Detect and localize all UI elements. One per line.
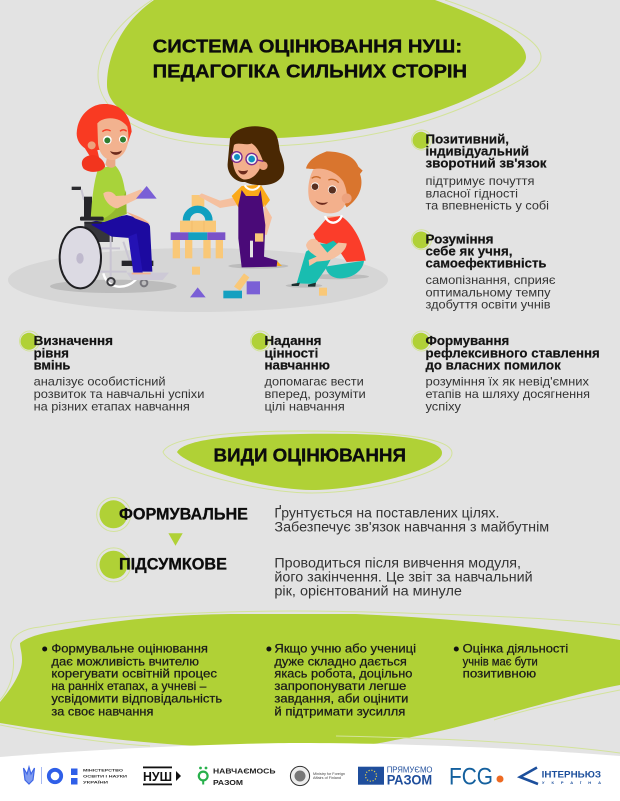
tip 3: позитивною xyxy=(463,667,536,681)
tip 1 xyxy=(42,642,222,718)
heading xyxy=(426,333,600,372)
point: value of learning xyxy=(250,331,366,413)
body text: самопізнання, сприяє xyxy=(426,273,556,287)
body text: розуміння їх як невід'ємних xyxy=(426,375,589,389)
body text: на різних етапах навчання xyxy=(34,399,190,413)
bullet circle xyxy=(412,130,432,150)
tip 1: усвідомити відповідальність xyxy=(51,692,222,706)
description: Забезпечує зв'язок навчання з майбутнім xyxy=(274,520,549,535)
tip 1: за своє навчання xyxy=(51,704,153,718)
tip 2 xyxy=(266,642,416,718)
heading xyxy=(426,131,547,171)
logo: EU moving together: ПРЯМУЄМО xyxy=(387,765,432,774)
logo: ministry of education: МІНІСТЕРСТВО xyxy=(83,768,123,772)
tip 3 xyxy=(454,642,568,681)
logo: NUSh: НУШ xyxy=(143,770,172,784)
logo: learning together xyxy=(199,766,276,787)
body text: допомагає вести xyxy=(264,375,364,389)
heading: індивідуальний xyxy=(426,144,529,159)
section heading: types of assessment xyxy=(163,431,452,493)
description: рік, орієнтований на минуле xyxy=(274,584,462,599)
body text: та впевненість у собі xyxy=(426,199,549,213)
heading: вмінь xyxy=(34,357,70,372)
illustration: children playing with blocks xyxy=(8,104,388,312)
heading: рефлексивного ставлення xyxy=(426,345,600,360)
description xyxy=(274,506,549,535)
tip 2: запропонувати легше xyxy=(274,679,407,693)
body text xyxy=(264,375,366,413)
heading xyxy=(426,231,546,271)
logo: FCG: FCG xyxy=(449,764,493,791)
tip 1: дає можливість вчителю xyxy=(51,654,199,668)
tip 1: на ранніх етапах, а учневі – xyxy=(51,679,207,693)
description: Ґрунтується на поставлених цілях. xyxy=(274,506,499,521)
point: positive feedback xyxy=(412,130,549,213)
point: level of skills xyxy=(20,331,204,413)
body text: цілі навчання xyxy=(264,399,345,413)
heading: самоефективність xyxy=(426,256,546,271)
logo: ministry for foreign affairs: Affairs of Finland xyxy=(313,776,341,780)
heading: себе як учня, xyxy=(426,244,512,259)
logo: ministry for foreign affairs: Ministry for Foreign xyxy=(313,772,345,776)
logo: Internews Ukraine xyxy=(520,768,601,785)
bottom green panel with tips xyxy=(0,611,620,753)
body text: здобуття освіти учнів xyxy=(426,298,550,312)
tip 3: Оцінка діяльності xyxy=(463,642,568,656)
heading xyxy=(264,333,330,372)
heading: Надання xyxy=(264,333,322,348)
body text: підтримує почуття xyxy=(426,174,534,188)
body text: оптимальному темпу xyxy=(426,285,550,299)
title: СИСТЕМА ОЦІНЮВАННЯ НУШ: xyxy=(153,36,462,57)
body text xyxy=(426,273,556,312)
arrow: down triangle xyxy=(168,533,183,546)
description: Проводиться після вивчення модуля, xyxy=(274,556,521,571)
logo: learning together: РАЗОМ xyxy=(213,778,243,787)
description: його закінчення. Це звіт за навчальний xyxy=(274,570,533,585)
label: ПІДСУМКОВЕ xyxy=(119,555,227,574)
bullet circle xyxy=(20,331,40,351)
tip 2: Якщо учню або учениці xyxy=(274,642,416,656)
heading: навчанню xyxy=(264,357,330,372)
circle marker xyxy=(97,498,131,532)
description xyxy=(274,556,533,599)
girl with glasses xyxy=(198,126,288,269)
tip 1: Формувальне оцінювання xyxy=(51,642,208,656)
logo: ministry of education xyxy=(41,767,128,784)
logo: Internews Ukraine: УКРАЇНА xyxy=(542,780,601,785)
logo: ministry of education: ОСВІТИ І НАУКИ xyxy=(83,775,128,779)
bullet circle xyxy=(412,230,432,250)
logo: trident xyxy=(24,767,34,784)
body text: етапів на шляху досягнення xyxy=(426,387,590,401)
tip 1: корегувати освітній процес xyxy=(51,667,217,681)
point: reflective attitude to mistakes xyxy=(412,331,600,413)
tip 3: учнів має бути xyxy=(463,654,538,668)
logo: NUSh xyxy=(143,766,181,785)
heading: Формування xyxy=(426,333,509,348)
title xyxy=(153,36,467,82)
body text xyxy=(34,375,204,413)
bullet circle xyxy=(412,331,432,351)
logo: ministry of education: УКРАЇНИ xyxy=(83,780,109,784)
bullet circle xyxy=(250,331,270,351)
body text xyxy=(426,174,549,213)
type: formative xyxy=(97,498,549,535)
logo: EU moving together xyxy=(358,765,432,788)
woman in wheelchair xyxy=(50,104,177,293)
heading: цінності xyxy=(264,345,318,360)
building blocks xyxy=(171,195,327,298)
circle marker xyxy=(97,548,131,582)
floor ellipse xyxy=(8,248,388,312)
heading: Розуміння xyxy=(426,231,494,246)
boy sitting xyxy=(286,151,369,288)
body text: успіху xyxy=(426,399,461,413)
logo: Internews Ukraine: ІНТЕРНЬЮЗ xyxy=(542,769,601,779)
body text: розвиток та навчальні успіхи xyxy=(34,387,204,401)
body text: аналізує особистісний xyxy=(34,375,166,389)
footer with partner logos xyxy=(0,743,620,801)
heading xyxy=(34,333,113,372)
body text: власної гідності xyxy=(426,186,518,200)
point: self-understanding xyxy=(412,230,556,312)
tip 2: завдання, аби оцінити xyxy=(274,692,409,706)
tip 2: й підтримати зусилля xyxy=(274,704,405,718)
heading: рівня xyxy=(34,345,69,360)
header blob with title xyxy=(98,0,541,146)
heading: до власних помилок xyxy=(426,357,561,372)
body text: вперед, розуміти xyxy=(264,387,366,401)
logo: ministry for foreign affairs xyxy=(290,766,345,786)
heading: Позитивний, xyxy=(426,131,509,146)
section heading: types of assessment: ВИДИ ОЦІНЮВАННЯ xyxy=(214,445,406,466)
heading: зворотний зв'язок xyxy=(426,156,547,171)
heading: Визначення xyxy=(34,333,113,348)
label: ФОРМУВАЛЬНЕ xyxy=(119,504,248,523)
logo: learning together: НАВЧАЄМОСЬ xyxy=(213,766,276,775)
body text xyxy=(426,375,590,413)
tip 2: дуже складно дається xyxy=(274,654,407,668)
tip 2: якась робота, доцільно xyxy=(274,667,413,681)
title: ПЕДАГОГІКА СИЛЬНИХ СТОРІН xyxy=(153,61,467,82)
logo: EU moving together: РАЗОМ xyxy=(387,773,432,788)
type: summative xyxy=(97,548,533,599)
